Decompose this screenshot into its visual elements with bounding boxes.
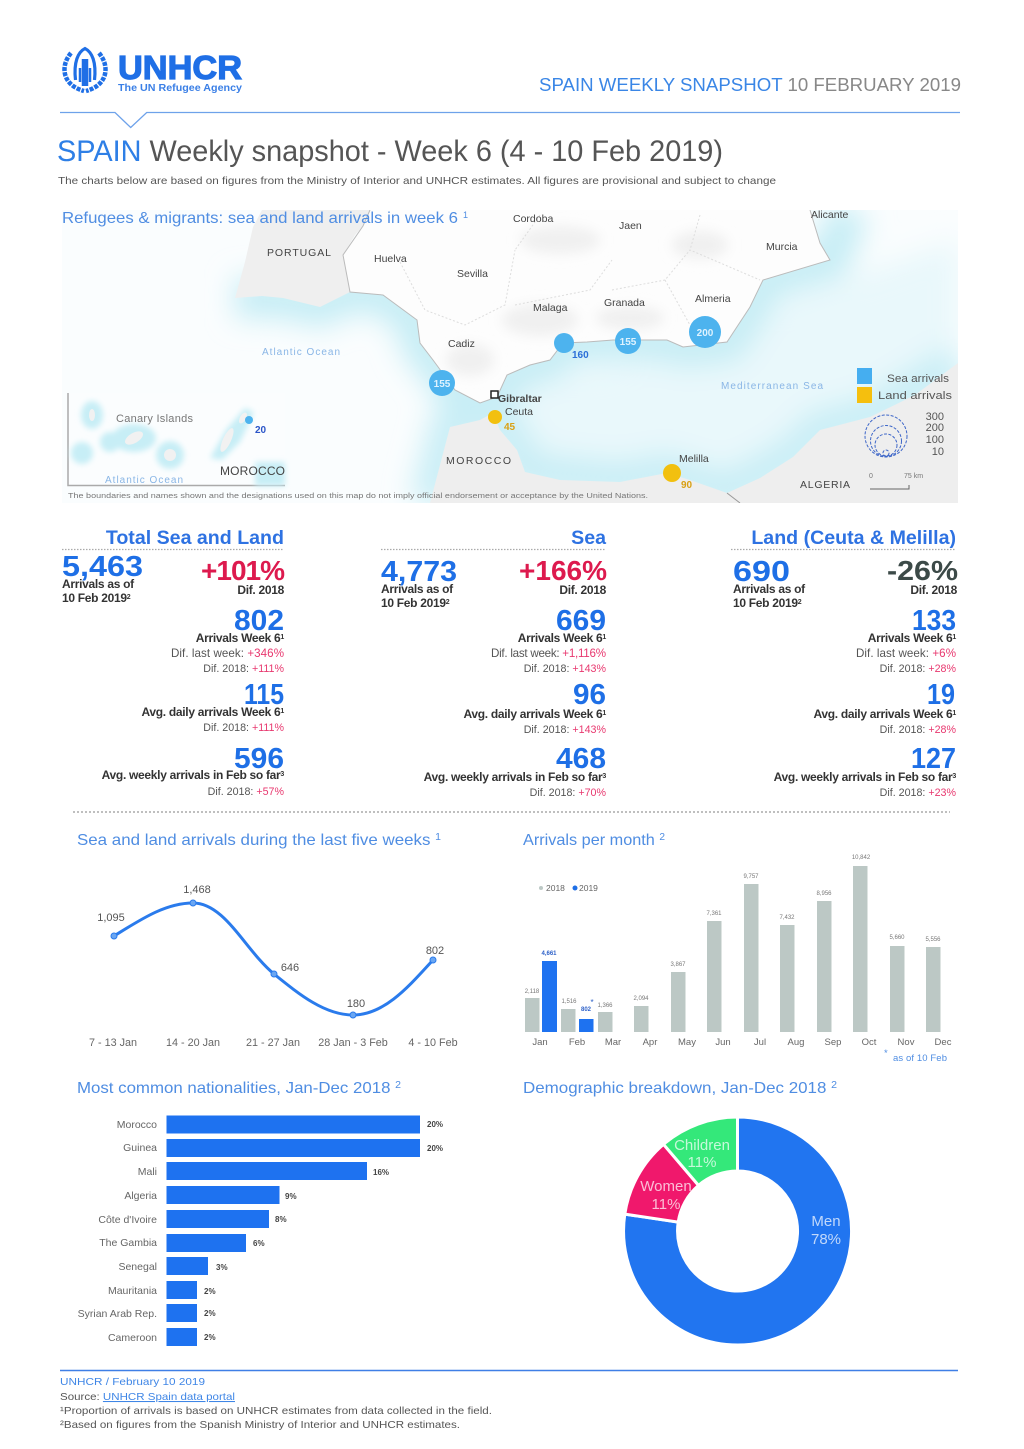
daily caption: 1 [952,710,956,717]
map place labels: Melilla [679,453,709,465]
last week diff: Dif. last week: +6% [856,647,956,660]
map heading: Refugees & migrants: sea and land arrivals in week 6 [62,210,458,227]
total arrivals date: 2 [798,599,802,606]
bubbles: arrivals per region: 90 [681,480,693,491]
map legend: 200 [926,422,944,434]
weekly average: 127 [911,743,956,775]
bar chart: nationalities: 2% [204,1309,216,1318]
map place labels: Cordoba [513,213,553,225]
map place labels: Granada [604,297,645,309]
footnote 1: ¹Proportion of arrivals is based on UNHCR estimates from data collected in the field. [60,1405,492,1417]
map place labels: Malaga [533,302,568,314]
bar chart: arrivals per month: Sep [825,1037,841,1048]
weekly average: 468 [556,743,606,775]
map legend: 100 [926,434,944,446]
map place labels: Gibraltar [498,393,542,405]
bubbles: arrivals per region [429,316,721,491]
last week diff: Dif. last week: +1,116% [491,647,606,660]
bar chart: arrivals per month: 3,867 [670,962,686,968]
bar chart: arrivals per month: May [678,1037,696,1048]
segment: men [624,1117,852,1345]
weekly average diff: Dif. 2018: +23% [880,787,956,799]
weekly arrivals: 669 [556,605,606,637]
map place labels: Huelva [374,253,407,265]
2018 diff: Dif. 2018: +28% [880,663,956,675]
bar chart: arrivals per month: Nov [898,1037,915,1048]
map place labels: Sevilla [457,268,488,280]
bar chart: arrivals per month: Apr [643,1037,657,1048]
inset label: Canary Islands: Canary Islands [116,413,194,425]
bar chart: nationalities: 20% [427,1120,443,1129]
line chart: last five weeks: 646 [281,962,299,974]
map disclaimer: The boundaries and names shown and the designations used on this map do not imply official endorsement or acceptance by the United Nations. [68,493,648,500]
line chart: last five weeks: 28 Jan - 3 Feb [318,1037,388,1049]
bar chart: arrivals per month: Jan [532,1037,548,1048]
value: Canary arrivals: 20 [255,425,267,436]
panel: Canary Islands inset [67,393,285,486]
heading: demographics: 2 [831,1080,837,1091]
bar chart: nationalities: Morocco [117,1119,157,1131]
label: women: 11% [652,1196,680,1213]
daily caption: Avg. daily arrivals Week 6 [463,707,602,721]
heading: nationalities: Most common nationalities, Jan-Dec 2018 [77,1080,375,1097]
bar chart: arrivals per month: Aug [788,1037,804,1048]
bar chart: arrivals per month: * [590,998,594,1007]
map place labels [262,209,850,491]
segment: children [664,1117,738,1185]
map place labels: ALGERIA [800,479,850,491]
2018 diff: Dif. 2018: +111% [203,663,284,675]
bar chart: nationalities [78,1116,443,1346]
panel: Sea [381,527,607,799]
total arrivals date: 10 Feb 2019 [381,596,446,610]
bar chart: nationalities: Senegal [118,1261,157,1273]
weekly caption: 1 [602,634,606,641]
bar chart: arrivals per month: 4,661 [541,951,557,957]
daily caption: Avg. daily arrivals Week 6 [813,707,952,721]
bar chart: nationalities: Algeria [124,1190,157,1202]
line chart: last five weeks: 802 [426,945,444,957]
percent caption: Dif. 2018 [237,583,285,597]
bar chart: arrivals per month: Jun [715,1037,731,1048]
chart note: * [884,1048,888,1059]
map legend: Sea arrivals [887,373,950,385]
weekly caption: Arrivals Week 6 [868,631,952,645]
bar chart: arrivals per month: 1,366 [597,1003,613,1009]
label: men: 78% [811,1231,841,1248]
footer [60,1376,492,1431]
total arrivals: 690 [733,556,790,588]
icon: Gibraltar marker [491,391,498,398]
map legend: 75 km [904,473,923,480]
bubbles: arrivals per region: 155 [434,379,451,390]
bar chart: nationalities: Guinea [123,1142,157,1154]
bubbles: arrivals per region: 200 [697,328,714,339]
bar chart: arrivals per month: 7,432 [779,915,795,921]
bar chart: arrivals per month: 1,516 [561,999,577,1005]
bar chart: nationalities: 6% [253,1239,265,1248]
bar chart: nationalities: 8% [275,1215,287,1224]
panel: map of arrivals [62,209,958,503]
map place labels: Ceuta [505,406,533,418]
inset label: Morocco: MOROCCO [220,464,285,478]
footer source: Source: UNHCR Spain data portal [60,1391,235,1403]
weekly average caption: 3 [602,773,606,780]
map legend [857,368,953,489]
daily arrivals: 115 [244,679,284,711]
weekly average diff: Dif. 2018: +57% [208,786,284,798]
total arrivals caption: Arrivals as of [733,582,806,596]
bubbles: arrivals per region: 155 [620,337,637,348]
header snapshot label: SPAIN WEEKLY SNAPSHOT 10 FEBRUARY 2019 [539,74,961,95]
chart note: as of 10 Feb [893,1053,947,1064]
daily diff: Dif. 2018: +111% [203,722,284,734]
bar chart: arrivals per month: Jul [754,1037,766,1048]
bar chart: arrivals per month: 5,660 [889,935,905,941]
percent caption: Dif. 2018 [910,583,958,597]
line chart: last five weeks: 4 - 10 Feb [408,1037,458,1049]
segment: women [625,1144,698,1222]
total arrivals date: 10 Feb 2019 [733,596,798,610]
bar chart: nationalities: 2% [204,1333,216,1342]
line chart: last five weeks: 7 - 13 Jan [89,1037,137,1049]
weekly average caption: Avg. weekly arrivals in Feb so far [424,770,602,784]
daily diff: Dif. 2018: +28% [880,724,956,736]
weekly caption: Arrivals Week 6 [196,631,280,645]
bar chart: nationalities: 3% [216,1263,228,1272]
total arrivals: 4,773 [381,556,457,588]
map legend: 300 [926,411,944,423]
bar chart: nationalities: Côte d'Ivoire [98,1214,157,1226]
heading: five weeks: 1 [435,832,441,843]
label: children: Children [674,1137,730,1154]
line chart: last five weeks [89,884,458,1049]
total arrivals date: 10 Feb 2019 [62,591,127,605]
heading: arrivals per month: Arrivals per month [523,832,653,849]
heading: arrivals per month: 2 [659,832,665,843]
weekly average: 596 [234,743,284,775]
percent difference: -26% [887,555,958,586]
daily arrivals: 96 [573,679,606,711]
subtitle: The charts below are based on figures from the Ministry of Interior and UNHCR estimates. All figures are provisional and subject to change [58,175,776,187]
map place labels: Alicante [811,209,849,221]
bar chart: arrivals per month [525,855,952,1064]
line chart: last five weeks: 14 - 20 Jan [166,1037,220,1049]
bar chart: nationalities: Mali [138,1166,157,1178]
percent difference: +101% [201,555,285,586]
weekly caption: Arrivals Week 6 [518,631,602,645]
weekly average caption: Avg. weekly arrivals in Feb so far [774,770,952,784]
bar chart: nationalities: Syrian Arab Rep. [78,1308,157,1320]
bar chart: arrivals per month: 2,118 [525,989,540,995]
bar chart: nationalities: Cameroon [108,1332,157,1344]
total arrivals date: 2 [446,599,450,606]
bar chart: arrivals per month: 5,556 [925,937,941,943]
total arrivals: 5,463 [62,551,143,583]
weekly average caption: 3 [952,773,956,780]
daily arrivals: 19 [927,679,955,711]
line chart: last five weeks: 1,095 [97,912,125,924]
line chart: last five weeks: 180 [347,998,365,1010]
total arrivals caption: Arrivals as of [381,582,454,596]
total arrivals caption: Arrivals as of [62,577,135,591]
bar chart: nationalities: Mauritania [108,1285,157,1297]
chart legend [539,883,598,893]
bar chart: arrivals per month: 7,361 [706,911,722,917]
daily diff: Dif. 2018: +143% [524,724,606,736]
daily caption: 1 [602,710,606,717]
bar chart: nationalities: 16% [373,1168,389,1177]
map place labels: Mediterranean Sea [721,381,823,392]
bar chart: arrivals per month: 9,757 [743,874,759,880]
footer credit: UNHCR / February 10 2019 [60,1376,205,1388]
icon: UNHCR emblem [64,48,106,91]
inset label: Atlantic Ocean: Atlantic Ocean [105,475,183,486]
map place labels: Jaen [619,220,642,232]
total arrivals date: 2 [127,594,131,601]
label: men: Men [811,1213,841,1230]
map legend: Land arrivals [878,390,953,402]
chart legend: 2019 [579,883,598,893]
logo tagline: The UN Refugee Agency [118,82,242,94]
weekly caption: 1 [280,634,284,641]
bar chart: arrivals per month: Dec [935,1037,952,1048]
bar chart: nationalities: 2% [204,1287,216,1296]
2018 diff: Dif. 2018: +143% [524,663,606,675]
chart note [884,1048,947,1064]
bar chart: arrivals per month: 10,842 [852,855,871,861]
map place labels: MOROCCO [446,455,511,467]
percent caption: Dif. 2018 [559,583,607,597]
heading: nationalities: 2 [395,1080,401,1091]
line chart: last five weeks: 1,468 [183,884,211,896]
map place labels: PORTUGAL [267,247,331,259]
bar chart: nationalities: 20% [427,1144,443,1153]
weekly average caption: Avg. weekly arrivals in Feb so far [102,768,280,782]
heading: Total Sea and Land [106,527,284,549]
map place labels: Cadiz [448,338,475,350]
map place labels: Murcia [766,241,798,253]
heading: Sea [571,527,607,549]
bar chart: nationalities: The Gambia [99,1237,157,1249]
chart legend: 2018 [546,883,565,893]
bar chart: arrivals per month: Mar [605,1037,621,1048]
bar chart: arrivals per month: Feb [569,1037,585,1048]
map heading footnote mark: 1 [463,210,468,220]
map place labels: Atlantic Ocean [262,347,340,358]
map legend: 10 [932,446,944,458]
donut chart: demographics [624,1117,852,1345]
weekly average diff: Dif. 2018: +70% [530,787,606,799]
panel: Land (Ceuta & Melilla) [731,527,958,799]
map legend: 0 [869,473,873,480]
bubble: Canary arrivals [245,416,253,424]
daily caption: 1 [280,708,284,715]
weekly caption: 1 [952,634,956,641]
title: SPAIN Weekly snapshot - Week 6 (4 - 10 Feb 2019) [57,135,723,168]
weekly arrivals: 802 [234,605,284,637]
label: women: Women [640,1178,692,1195]
heading: five weeks: Sea and land arrivals during the last five weeks [77,832,411,849]
bar chart: arrivals per month: Oct [862,1037,877,1048]
last week diff: Dif. last week: +346% [171,647,284,660]
bubbles: arrivals per region: 160 [572,350,589,361]
label: children: 11% [688,1154,716,1171]
bar chart: arrivals per month: 2,094 [633,996,649,1002]
bubbles: arrivals per region: 45 [504,422,516,433]
map place labels: Almeria [695,293,731,305]
logo wordmark: UNHCR [118,49,242,86]
bar chart: arrivals per month: 8,956 [816,891,832,897]
logo: UNHCR [64,48,242,91]
percent difference: +166% [519,555,607,586]
daily caption: Avg. daily arrivals Week 6 [141,705,280,719]
heading: demographics: Demographic breakdown, Jan-Dec 2018 [523,1080,809,1097]
panel: Total Sea and Land [62,527,285,798]
bar chart: nationalities: 9% [285,1192,297,1201]
line chart: last five weeks: 21 - 27 Jan [246,1037,300,1049]
footnote 2: ²Based on figures from the Spanish Ministry of Interior and UNHCR estimates. [60,1419,460,1431]
bar chart: arrivals per month: 802 [581,1007,592,1013]
heading: Land (Ceuta & Melilla) [751,527,956,549]
weekly average caption: 3 [280,771,284,778]
weekly arrivals: 133 [912,605,956,637]
